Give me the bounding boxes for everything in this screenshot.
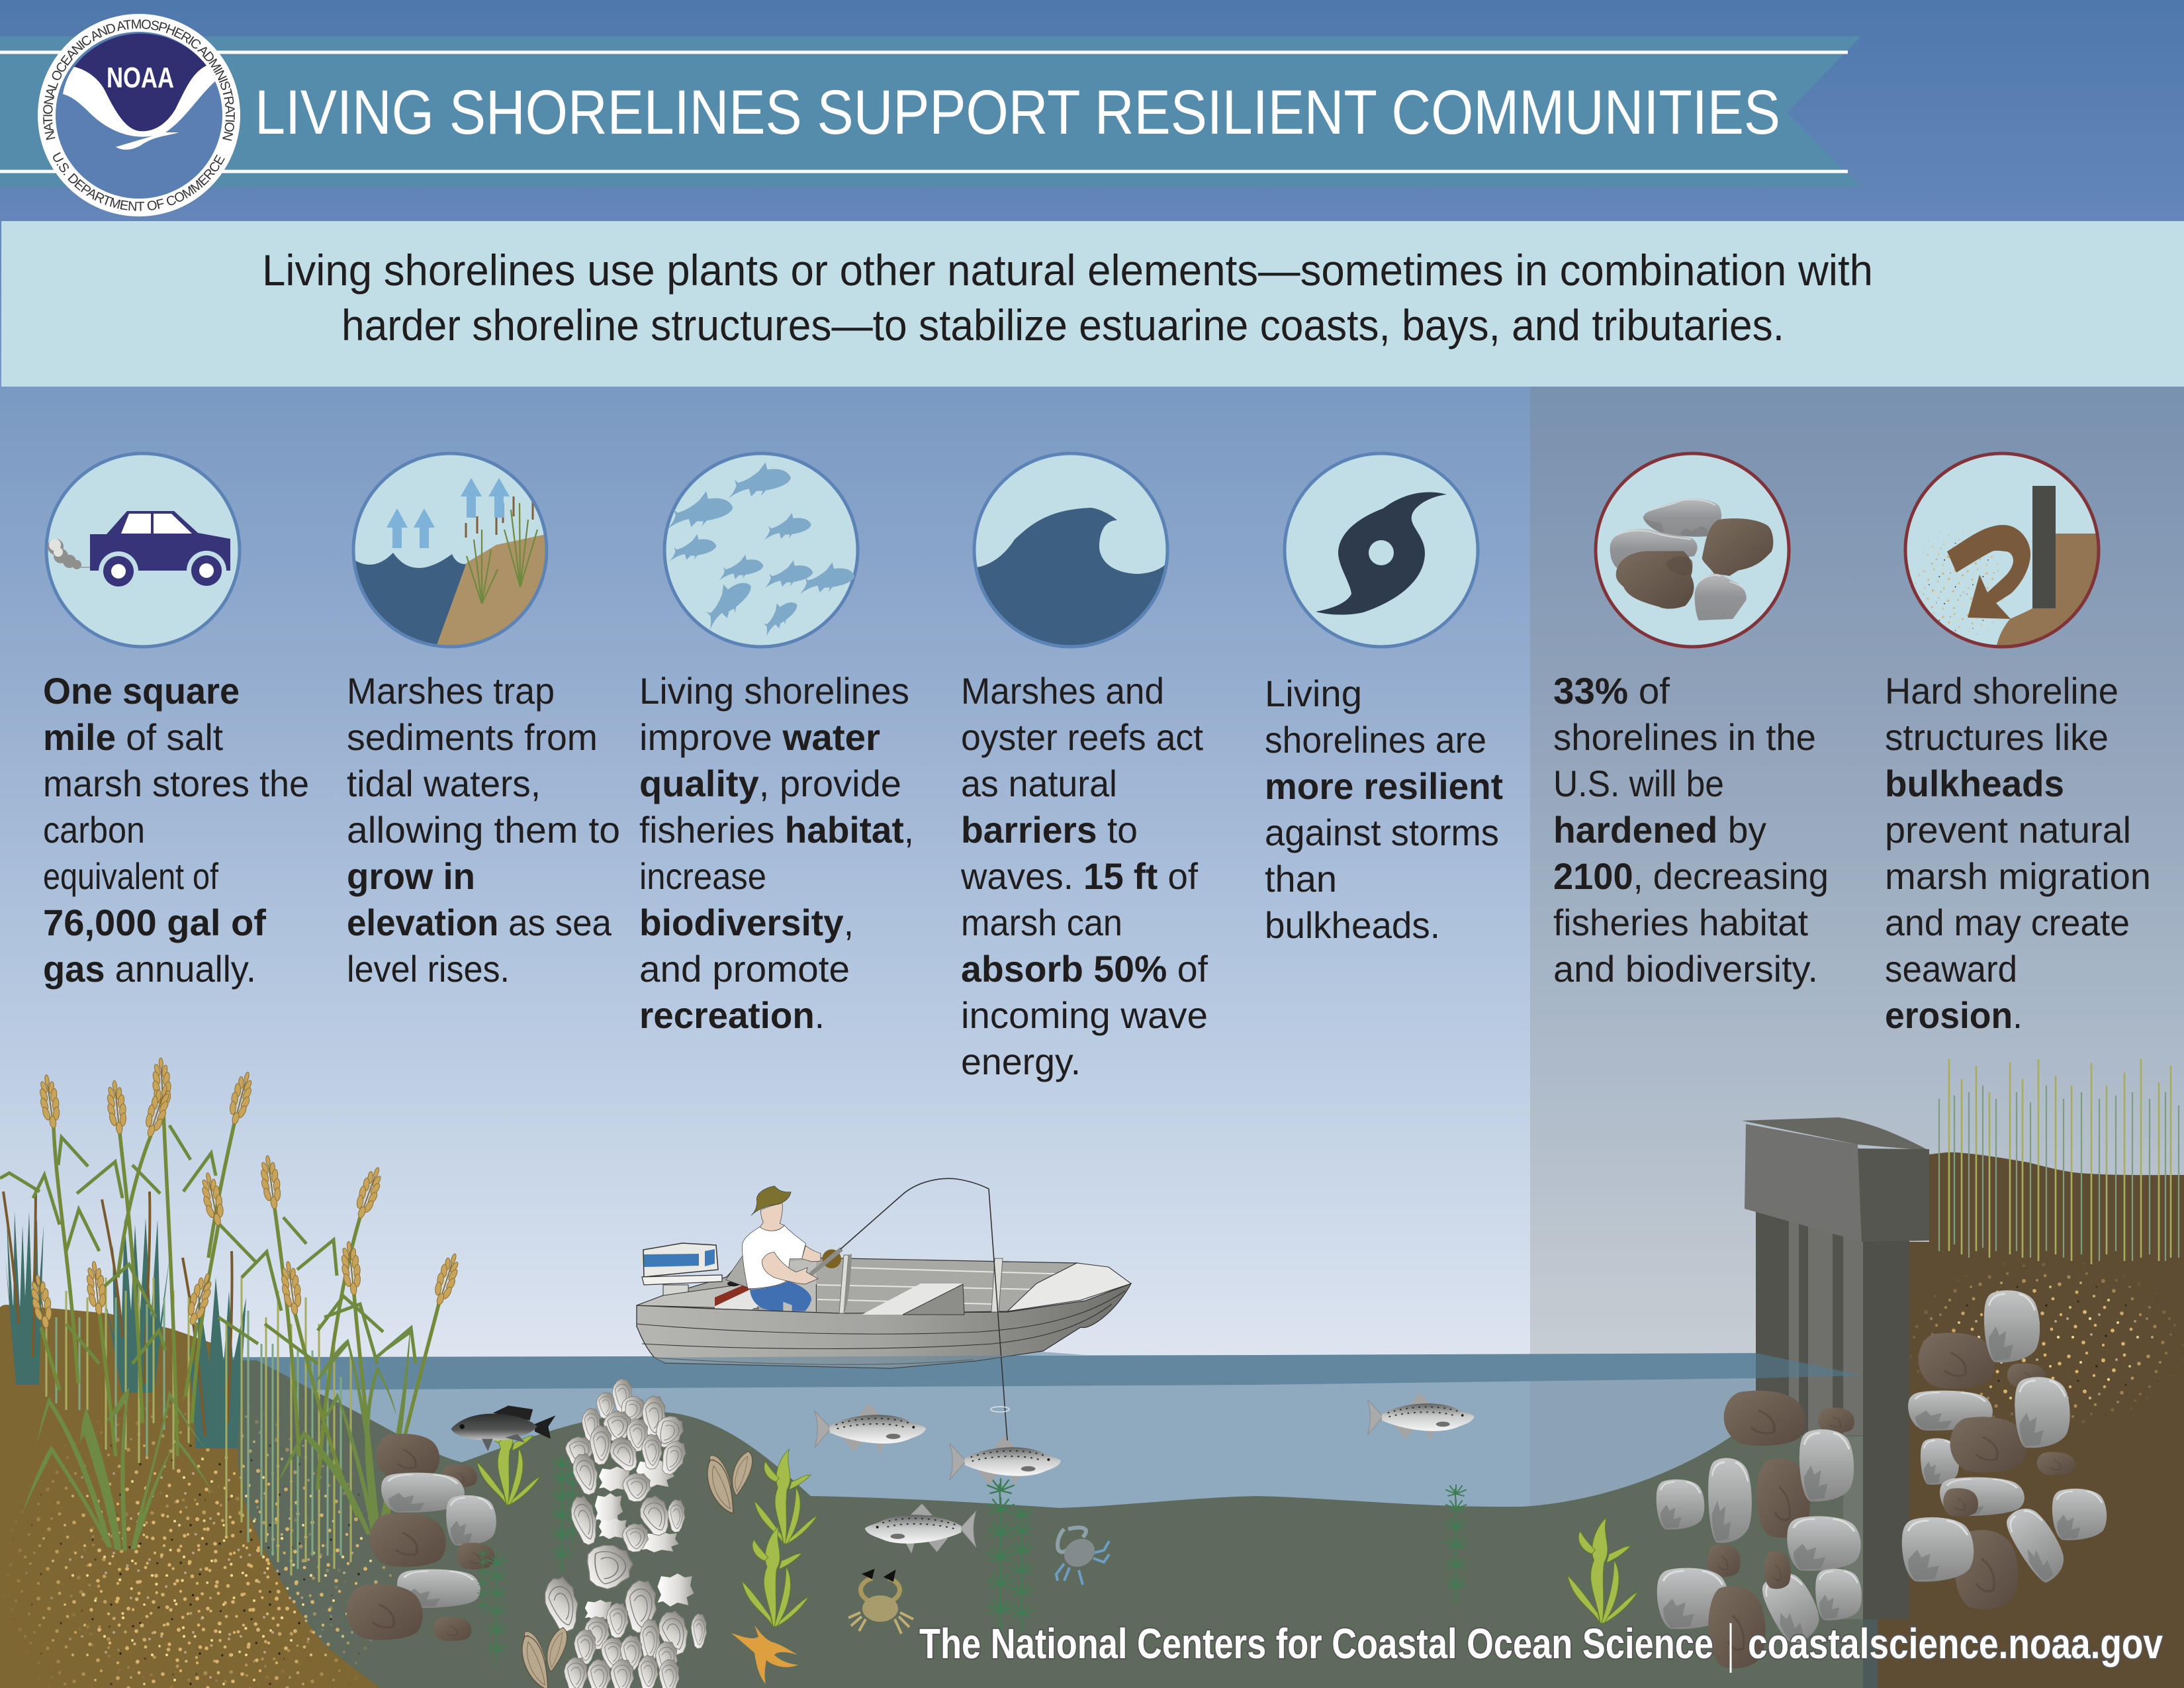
text: water quality and habitat: biodiversity, xyxy=(639,902,854,943)
text: marshes trap sediments: level rises. xyxy=(347,948,510,990)
text: resilience against storms: than xyxy=(1265,858,1337,900)
footer credit: The National Centers for Coastal Ocean Science xyxy=(919,1620,1713,1667)
text: hardened shorelines by 2100: 2100, decreasing xyxy=(1553,855,1829,897)
boat interior xyxy=(637,1256,1077,1314)
fishing rod tip and line xyxy=(841,1178,1007,1440)
rear deck and red box xyxy=(637,1284,758,1309)
trout swimming left xyxy=(865,1503,976,1554)
blue crab xyxy=(1056,1528,1109,1585)
text: natural wave barriers: absorb 50% of xyxy=(961,948,1208,990)
text: resilience against storms xyxy=(1265,673,1503,946)
icon: hurricane xyxy=(1285,453,1478,647)
text: salt marsh carbon storage: 76,000 gal of xyxy=(43,902,266,943)
boat waterline tint xyxy=(649,1352,1085,1368)
bulkhead wall columns xyxy=(1756,1205,1864,1443)
text: marshes trap sediments: allowing them to xyxy=(347,809,620,851)
rock pile left of bulkhead xyxy=(1657,1391,1862,1668)
text: bulkheads prevent migration: erosion. xyxy=(1885,994,2023,1036)
marsh plants xyxy=(0,1057,465,1582)
angler and bench detail xyxy=(715,1186,842,1312)
left sand speckles xyxy=(7,1397,392,1688)
ribs xyxy=(839,1255,1003,1313)
text: hardened shorelines by 2100: shorelines in the xyxy=(1553,716,1816,758)
text: bulkheads prevent migration xyxy=(1885,670,2151,1036)
text: marshes trap sediments: elevation as sea xyxy=(347,902,612,943)
text: natural wave barriers: Marshes and xyxy=(961,670,1164,712)
text: bulkheads prevent migration: Hard shoreline xyxy=(1885,670,2118,712)
text: marshes trap sediments: sediments from xyxy=(347,716,598,758)
bow deck xyxy=(1007,1263,1131,1311)
text: water quality and habitat: increase xyxy=(639,855,766,897)
reed leaves xyxy=(0,1125,416,1364)
tall reed stems xyxy=(41,1112,439,1532)
text: salt marsh carbon storage: mile of salt xyxy=(43,716,223,758)
oyster reef xyxy=(540,1379,707,1688)
text: bulkheads prevent migration: bulkheads xyxy=(1885,763,2064,804)
outboard motor xyxy=(642,1243,722,1300)
text: hardened shorelines by 2100: fisheries habitat xyxy=(1553,902,1808,943)
rock pile in earth behind bulkhead xyxy=(1902,1290,2107,1609)
seat xyxy=(862,1284,963,1315)
low grass tufts xyxy=(22,1328,410,1551)
title: LIVING SHORELINES SUPPORT RESILIENT COMMUNITIES xyxy=(255,77,1780,148)
cattail seed stems xyxy=(3,1188,232,1436)
text: natural wave barriers: marsh can xyxy=(961,902,1122,943)
text: bulkheads prevent migration: structures like xyxy=(1885,716,2109,758)
icon: bulkhead causing erosion xyxy=(1905,453,2101,652)
cattail clumps xyxy=(5,1211,246,1448)
text: water quality and habitat: and promote xyxy=(639,948,850,990)
shoreline rocks xyxy=(347,1434,496,1641)
icon: car emitting exhaust xyxy=(46,453,240,647)
text: resilience against storms: bulkheads. xyxy=(1265,904,1440,946)
green fern-like seagrass xyxy=(477,1456,1467,1665)
reed seed heads xyxy=(36,1074,64,1129)
starfish xyxy=(731,1625,798,1684)
thin marsh grasses xyxy=(46,1278,351,1582)
text: hardened shorelines by 2100: 33% of xyxy=(1553,670,1670,712)
text: marshes trap sediments: grow in xyxy=(347,855,475,897)
text: salt marsh carbon storage xyxy=(43,670,309,990)
text: marshes trap sediments: tidal waters, xyxy=(347,763,541,804)
text: natural wave barriers: waves. 15 ft of xyxy=(960,855,1198,897)
text: bulkheads prevent migration: and may create xyxy=(1885,902,2130,943)
text: hardened shorelines by 2100: U.S. will be xyxy=(1553,763,1724,804)
text: bulkheads prevent migration: marsh migration xyxy=(1885,855,2151,897)
NOAA seal: U.S. DEPARTMENT OF COMMERCE xyxy=(53,152,225,211)
text: water quality and habitat: quality, provide xyxy=(639,763,901,804)
text: water quality and habitat: improve water xyxy=(639,716,880,758)
hardened shoreline shaded panel xyxy=(1530,387,2184,1357)
trout on fishing line xyxy=(950,1436,1061,1486)
text: bulkheads prevent migration: prevent natural xyxy=(1885,809,2131,851)
title ribbon banner xyxy=(0,36,1861,187)
tan crab xyxy=(848,1571,913,1634)
text: natural wave barriers: energy. xyxy=(961,1041,1081,1082)
text: hardened shorelines by 2100: and biodiversity. xyxy=(1553,948,1818,990)
bulkhead cap and side xyxy=(1742,1117,1929,1688)
intro panel: harder shoreline structures—to stabilize estuarine coasts, bays, and tributaries. xyxy=(341,301,1784,350)
icon: school of fish xyxy=(664,453,858,647)
right earth behind bulkhead xyxy=(1878,1152,2184,1688)
text: resilience against storms: against storms xyxy=(1265,812,1499,853)
text: natural wave barriers: oyster reefs act xyxy=(961,716,1203,758)
black sea bass xyxy=(451,1405,556,1451)
text: salt marsh carbon storage: carbon xyxy=(43,809,145,851)
NOAA seal: NATIONAL OCEANIC AND ATMOSPHERIC ADMINISTRATION xyxy=(43,19,235,141)
NOAA seal: NOAA xyxy=(107,62,174,94)
text: salt marsh carbon storage: gas annually. xyxy=(43,948,256,990)
text: marshes trap sediments: Marshes trap xyxy=(347,670,555,712)
text: bulkheads prevent migration: seaward xyxy=(1885,948,2017,990)
text: water quality and habitat: recreation. xyxy=(639,994,825,1036)
NOAA seal xyxy=(38,14,240,216)
seabed xyxy=(199,1360,1878,1688)
icon: marsh elevation rising with sea level xyxy=(353,453,549,652)
text: hardened shorelines by 2100: hardened by xyxy=(1553,809,1766,851)
trout swimming xyxy=(815,1403,926,1454)
text: resilience against storms: more resilient xyxy=(1265,765,1503,807)
intro panel: Living shorelines use plants or other natural elements—sometimes in combination with xyxy=(262,246,1873,295)
water body xyxy=(0,1353,1762,1529)
text: resilience against storms: Living xyxy=(1265,673,1362,714)
text: hardened shorelines by 2100 xyxy=(1553,670,1829,990)
left marsh bank xyxy=(0,1305,381,1688)
text: natural wave barriers: barriers to xyxy=(961,809,1138,851)
right upland grasses xyxy=(1939,1059,2179,1264)
interior ribs xyxy=(817,1268,1072,1304)
trout swimming right xyxy=(1367,1393,1475,1440)
text: water quality and habitat: Living shorelines xyxy=(639,670,909,712)
text: natural wave barriers: incoming wave xyxy=(961,994,1208,1036)
icon: rocks xyxy=(1596,453,1789,647)
fisherman in aluminum boat xyxy=(637,1178,1131,1440)
text: natural wave barriers: as natural xyxy=(961,763,1117,804)
text: salt marsh carbon storage: One square xyxy=(43,670,240,712)
intro panel xyxy=(1,221,2184,387)
text: resilience against storms: shorelines are xyxy=(1265,719,1486,761)
text: natural wave barriers xyxy=(960,670,1208,1082)
text: salt marsh carbon storage: marsh stores the xyxy=(43,763,309,804)
right sand speckles xyxy=(1909,1263,2183,1423)
text: water quality and habitat xyxy=(639,670,914,1036)
text: salt marsh carbon storage: equivalent of xyxy=(43,855,218,897)
hull xyxy=(637,1284,1131,1368)
kelp plants xyxy=(477,1410,1638,1626)
text: marshes trap sediments xyxy=(347,670,620,990)
icon: breaking wave xyxy=(973,453,1169,652)
mussels xyxy=(516,1449,756,1688)
text: water quality and habitat: fisheries habitat, xyxy=(639,809,914,851)
